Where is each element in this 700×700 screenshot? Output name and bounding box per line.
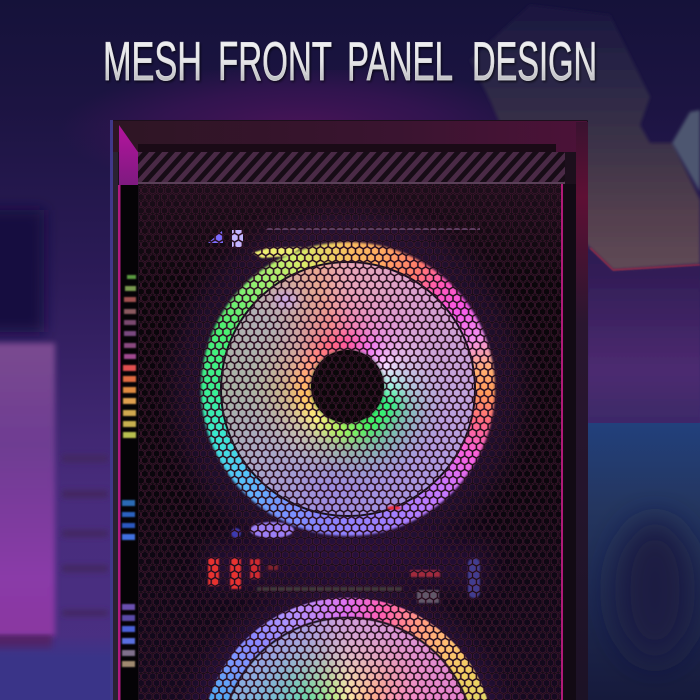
pink corner [119, 125, 138, 185]
dark shape on left wall [0, 210, 44, 332]
panel frame line [138, 182, 565, 184]
panel right pink edge [561, 184, 563, 700]
title: DESIGN [472, 30, 597, 92]
glowing pink column [0, 343, 55, 636]
fan 2 dark gap [220, 616, 476, 700]
black LED strip [120, 185, 138, 700]
hexagon red rim [590, 248, 700, 270]
mesh panel interior with fans [139, 184, 563, 700]
fan 2 blades disc [222, 618, 474, 700]
fan 1 dark gap [220, 260, 476, 516]
fan 1 ring [200, 242, 494, 536]
fan 1 hub rainbow [262, 300, 436, 478]
purple glow behind case [60, 70, 540, 190]
top right hexagon light [470, 5, 700, 270]
brick streaks on left wall [62, 455, 108, 616]
right wall [588, 248, 700, 423]
top vent stripes [138, 152, 565, 182]
top cap [113, 121, 587, 152]
title: FRONT [218, 30, 332, 92]
dark red band under column [0, 636, 52, 650]
LED segments [122, 275, 136, 667]
interior lights and glow [165, 208, 529, 700]
fan 1 red fleck [387, 506, 401, 510]
fan 2 ring [200, 597, 494, 700]
right outer edge [576, 122, 588, 700]
fan 1 blades disc [222, 262, 474, 514]
title: MESH [103, 30, 202, 92]
right side strip [563, 184, 576, 700]
left edge highlight [110, 120, 113, 700]
title: PANEL [347, 30, 453, 92]
blue base on left [0, 635, 112, 700]
dark shape lower right [615, 520, 695, 660]
case body [110, 120, 588, 700]
title [103, 30, 597, 92]
PC case [110, 120, 588, 700]
fan 2 hub rainbow [256, 636, 424, 700]
right lower blue area [588, 423, 700, 700]
fan 1 blade highlight [274, 292, 298, 306]
pale hexagon [672, 110, 700, 192]
fan 1 hub [310, 350, 384, 422]
pink vertical line [118, 185, 120, 700]
top vent shadow [138, 144, 556, 152]
